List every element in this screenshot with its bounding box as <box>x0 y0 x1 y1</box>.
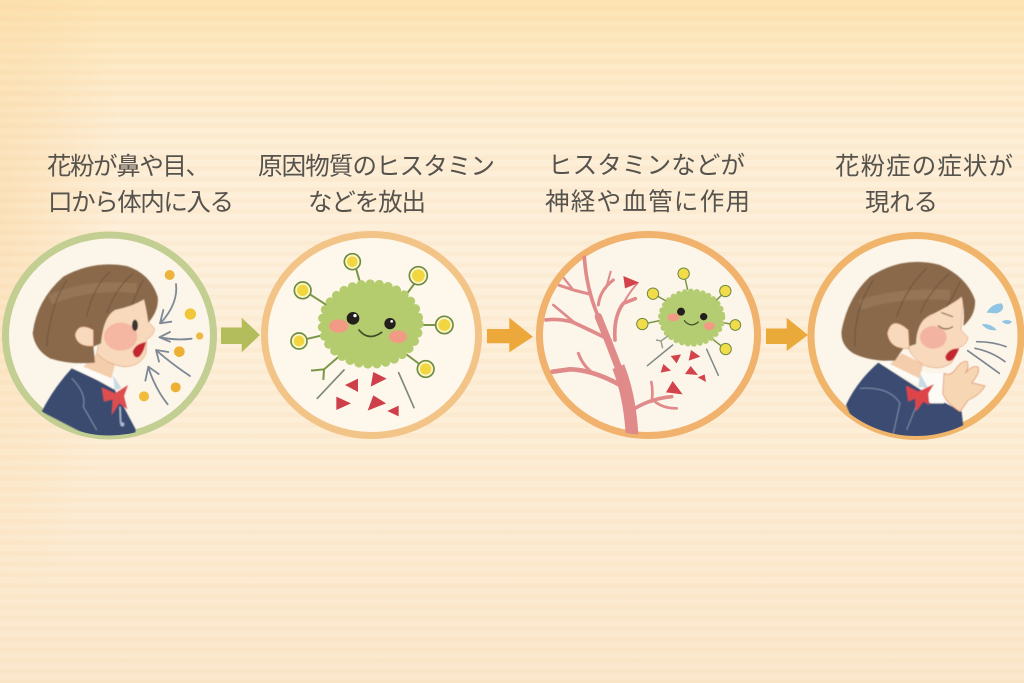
droplets <box>982 303 1012 330</box>
circle frame: step 1 <box>6 235 214 436</box>
knobs <box>291 254 453 377</box>
ear <box>75 327 93 346</box>
pollen body <box>322 284 419 364</box>
knobs <box>637 268 741 355</box>
illustration: girl inhaling pollen <box>33 264 203 437</box>
neck and face <box>83 352 115 378</box>
release lines <box>647 345 718 375</box>
histamine triangles <box>336 372 399 416</box>
cheek <box>104 323 137 351</box>
cheek <box>920 326 947 349</box>
shirt collar <box>74 363 115 389</box>
closed eye <box>938 313 953 329</box>
panel: step 1 pollen enters <box>6 152 234 437</box>
pollen dots <box>139 270 203 401</box>
illustration: blood vessel and pollen <box>546 257 741 435</box>
illustration: pollen character releasing histamine <box>291 254 453 416</box>
heading: step 1: 花粉が鼻や目、 <box>47 152 210 180</box>
hair <box>841 262 975 361</box>
heading: step 1 <box>47 152 234 216</box>
panel: step 3 action on nerves and vessels <box>540 152 758 436</box>
heading: step 4 <box>835 152 1013 216</box>
heading: step 4: 花粉症の症状が <box>835 152 1013 180</box>
mouth <box>133 342 146 357</box>
release lines <box>317 370 414 408</box>
pollen and arrows <box>139 270 203 404</box>
hand <box>943 361 985 412</box>
hair <box>33 264 158 363</box>
panel: step 4 symptoms appear <box>811 152 1021 437</box>
arrow: step 1 to 2 <box>221 318 260 352</box>
circle frame: step 4 <box>811 236 1021 436</box>
shirt collar <box>880 360 944 403</box>
heading: step 2: 原因物質のヒスタミン <box>258 152 495 180</box>
neck and face <box>890 353 923 378</box>
mouth <box>945 348 959 361</box>
arrow: step 2 to 3 <box>487 318 533 352</box>
eye <box>132 320 138 331</box>
infographic: pollen allergy process <box>2 152 1024 440</box>
face <box>329 312 407 343</box>
bow tie <box>906 384 934 412</box>
heading: step 1: 口から体内に入る <box>48 188 234 216</box>
heading: step 2 <box>258 152 495 216</box>
heading: step 4: 現れる <box>865 190 938 216</box>
face <box>667 308 715 330</box>
spokes <box>305 268 440 380</box>
arrow: step 3 to 4 <box>766 318 808 351</box>
histamine triangles <box>623 276 706 394</box>
panel: step 2 histamine release <box>258 152 495 436</box>
illustration: girl sneezing <box>841 262 1012 437</box>
heading: step 3: 神経や血管に作用 <box>545 188 750 216</box>
sneeze lines <box>968 342 1006 373</box>
circle frame: step 2 <box>264 234 478 436</box>
ear <box>887 323 909 348</box>
heading: step 3 <box>545 152 750 216</box>
heading: step 2: などを放出 <box>308 188 426 216</box>
pollen body <box>661 292 722 344</box>
heading: step 3: ヒスタミンなどが <box>548 152 745 180</box>
spokes <box>648 279 730 348</box>
blood vessel <box>546 257 677 435</box>
bow tie <box>102 385 128 415</box>
circle frame: step 3 <box>540 234 758 436</box>
jacket <box>846 363 963 437</box>
jacket <box>42 368 136 437</box>
inhale arrows <box>145 284 192 404</box>
